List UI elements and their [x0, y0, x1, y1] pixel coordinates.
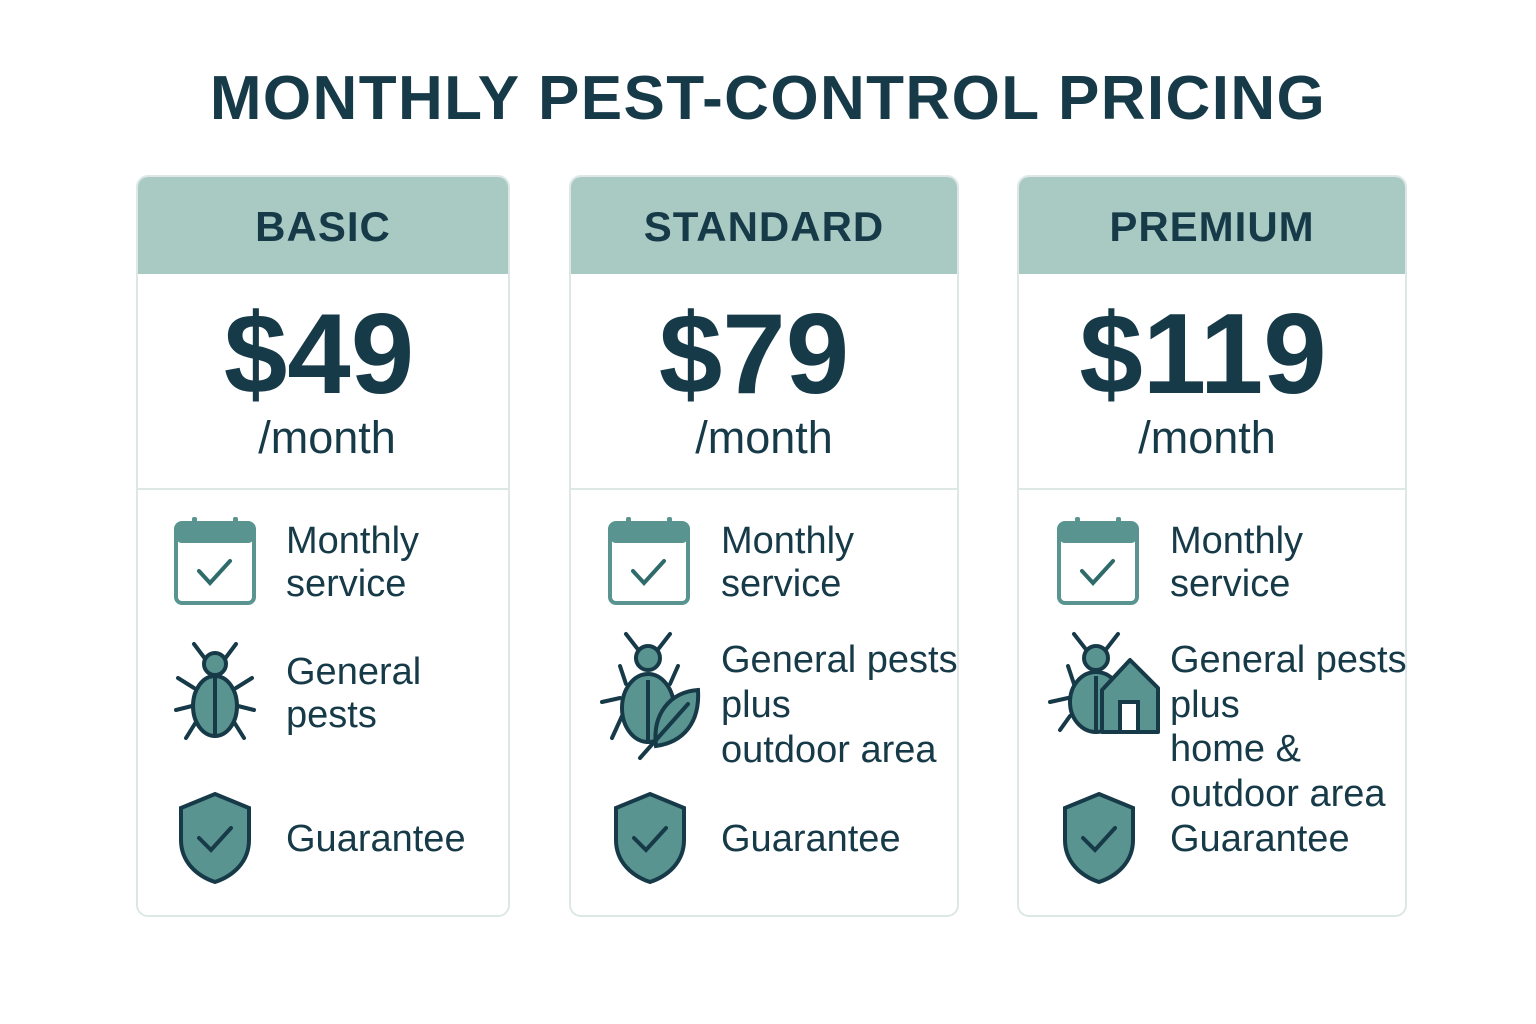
icon: bug with house: [1048, 632, 1160, 734]
text: general pests home: home &: [1170, 728, 1301, 770]
text: general pests outdoor: [721, 639, 958, 771]
text: general pests home: outdoor area: [1170, 772, 1386, 814]
icon: shield basic: [179, 792, 251, 884]
header: standard: [571, 177, 957, 274]
icon: shield premium: [1063, 792, 1135, 884]
text: guarantee basic: Guarantee: [286, 818, 466, 860]
panel: standard: [569, 175, 959, 917]
price: basic: $49: [224, 291, 414, 418]
divider: [138, 488, 508, 490]
text: general pests outdoor: General pests: [721, 639, 958, 681]
text: guarantee standard: Guarantee: [721, 818, 901, 860]
icon: shield standard: [614, 792, 686, 884]
text: monthly service standard: service: [721, 563, 841, 605]
per month: premium: /month: [1138, 412, 1276, 463]
text: monthly service basic: service: [286, 563, 406, 605]
header: premium: PREMIUM: [1109, 203, 1315, 250]
text: monthly service premium: [1170, 520, 1303, 605]
icon: calendar standard: [608, 517, 690, 605]
header: premium: [1019, 177, 1405, 274]
icon: bug with leaf: [600, 632, 700, 760]
text: general pests outdoor: plus: [721, 684, 791, 726]
text: general pests home: plus: [1170, 684, 1240, 726]
text: general pests outdoor: outdoor area: [721, 729, 936, 771]
header: basic: BASIC: [255, 203, 391, 250]
text: monthly service standard: [721, 520, 854, 605]
panel: basic: [136, 175, 510, 917]
title: MONTHLY PEST-CONTROL PRICING: [210, 64, 1326, 133]
price: standard: $79: [659, 291, 849, 418]
text: general pests basic: [286, 651, 421, 736]
text: monthly service standard: Monthly: [721, 520, 854, 562]
icon: calendar premium: [1057, 517, 1139, 605]
text: monthly service basic: [286, 520, 419, 605]
divider: [1019, 488, 1405, 490]
icon: calendar basic: [174, 517, 256, 605]
icon: bug basic: [174, 642, 256, 740]
text: general pests basic: General: [286, 651, 421, 693]
text: general pests basic: pests: [286, 694, 377, 736]
per month: basic: /month: [258, 412, 396, 463]
text: general pests home: General pests: [1170, 639, 1407, 681]
text: monthly service premium: service: [1170, 563, 1290, 605]
panel: premium: [1017, 175, 1407, 917]
divider: [571, 488, 957, 490]
text: monthly service premium: Monthly: [1170, 520, 1303, 562]
header: basic: [138, 177, 508, 274]
text: general pests home: [1170, 639, 1407, 814]
text: guarantee premium: Guarantee: [1170, 818, 1350, 860]
text: monthly service basic: Monthly: [286, 520, 419, 562]
header: standard: STANDARD: [644, 203, 884, 250]
per month: standard: /month: [695, 412, 833, 463]
price: premium: $119: [1079, 291, 1327, 418]
